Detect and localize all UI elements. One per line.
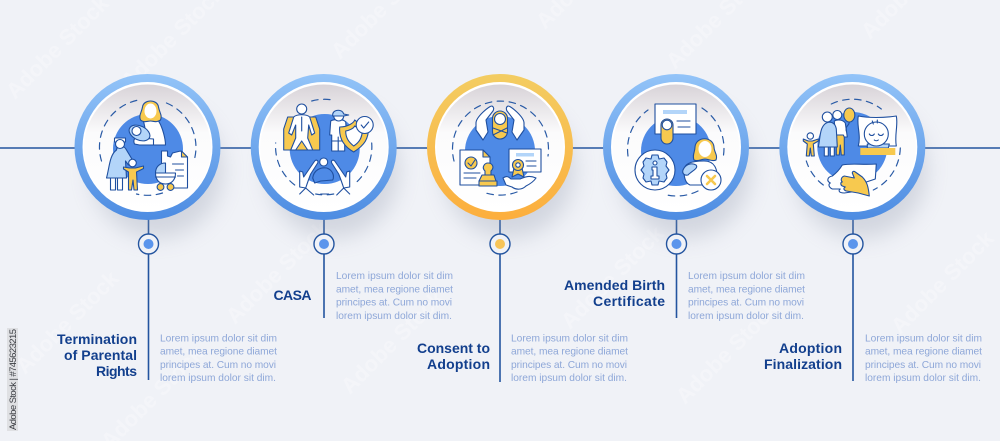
- text: Adobe Stock: [221, 215, 334, 329]
- body text: Lorem ipsum dolor sit dim: [336, 271, 453, 282]
- body text: Lorem ipsum dolor sit dim: [511, 334, 628, 344]
- timeline horizontal line: [0, 147, 1000, 149]
- step 4: amended birth certificate: [564, 74, 805, 322]
- icon: certificate with baby, info gear, mother with cross: [628, 104, 724, 196]
- body text: Lorem ipsum dolor sit dim: [865, 334, 982, 344]
- text: Adobe Stock: [336, 285, 449, 399]
- stock image credit: Adobe Stock | #745623215: [8, 329, 19, 430]
- body text: principes at. Cum no movi: [336, 298, 452, 309]
- text: Adobe Stock: [886, 225, 999, 339]
- body text: Lorem ipsum dolor sit dim: [688, 271, 805, 282]
- body text: lorem ipsum dolor sit dim.: [865, 373, 981, 384]
- step 5: adoption finalization: [764, 74, 982, 384]
- body text: principes at. Cum no movi: [865, 360, 981, 371]
- icon: mother, nurse, child and stroller: [99, 100, 196, 195]
- heading: adoption finalization: Finalization: [764, 356, 842, 372]
- heading: termination of parental rights: Termination: [57, 331, 137, 347]
- text: Adobe Stock: [556, 220, 669, 334]
- heading: termination of parental rights: of Parental: [64, 347, 137, 363]
- body text: lorem ipsum dolor sit dim.: [160, 373, 276, 384]
- body text: lorem ipsum dolor sit dim.: [688, 311, 804, 322]
- icon: seated advocate, boy with shield, protected child: [276, 99, 373, 195]
- icon: baby in hands, stamped document, certificate: [452, 101, 548, 195]
- step 3: consent to adoption (highlighted): [417, 74, 628, 384]
- step 1: termination of parental rights: [57, 74, 277, 384]
- body text: principes at. Cum no movi: [160, 360, 276, 371]
- body text: Lorem ipsum dolor sit dim: [160, 334, 277, 344]
- icon: family with balloon, sleeping baby, joined hands: [803, 99, 900, 196]
- heading: CASA: CASA: [274, 287, 312, 303]
- body text: lorem ipsum dolor sit dim.: [336, 311, 452, 322]
- heading: amended birth certificate: Certificate: [593, 293, 665, 309]
- heading: consent to adoption: Consent to: [417, 340, 490, 356]
- body text: amet, mea regione diamet: [160, 347, 277, 358]
- body text: principes at. Cum no movi: [511, 360, 627, 371]
- heading: amended birth certificate: Amended Birth: [564, 277, 665, 293]
- body text: amet, mea regione diamet: [336, 284, 453, 296]
- heading: termination of parental rights: Rights: [96, 363, 137, 379]
- body text: amet, mea regione diamet: [688, 284, 805, 296]
- heading: consent to adoption: Adoption: [427, 356, 490, 372]
- heading: adoption finalization: Adoption: [779, 340, 842, 356]
- body text: lorem ipsum dolor sit dim.: [511, 373, 627, 384]
- body text: amet, mea regione diamet: [511, 347, 628, 358]
- body text: principes at. Cum no movi: [688, 298, 804, 309]
- text: Adobe Stock: [11, 265, 124, 379]
- text: Adobe Stock: [671, 295, 784, 409]
- body text: amet, mea regione diamet: [865, 347, 982, 358]
- step 2: CASA: [251, 74, 453, 322]
